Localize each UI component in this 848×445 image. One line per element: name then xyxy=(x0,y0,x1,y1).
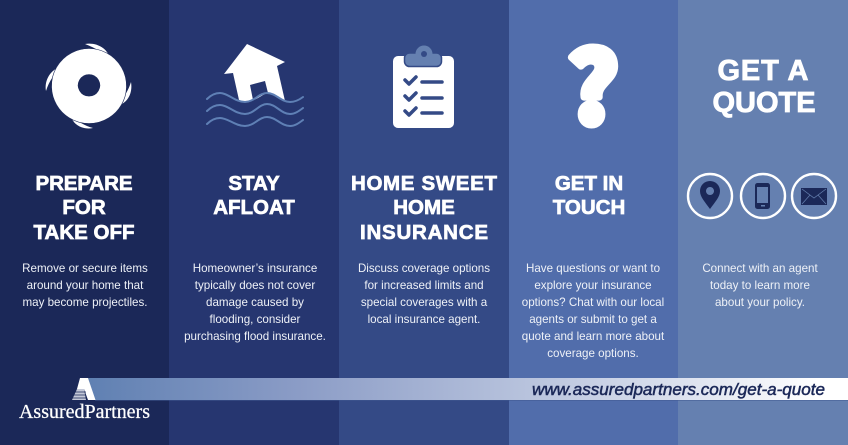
body text: Remove or secure items xyxy=(22,262,148,275)
body text: coverage options. xyxy=(547,347,639,360)
logo wordmark: AssuredPartners xyxy=(19,401,150,423)
heading: PREPARE xyxy=(36,172,132,195)
icon: location pin xyxy=(688,174,732,218)
heading: AFLOAT xyxy=(213,196,295,219)
heading: QUOTE xyxy=(712,87,816,119)
body text: agents or submit to get a xyxy=(529,313,657,326)
heading: INSURANCE xyxy=(360,221,488,244)
panel: get a quote xyxy=(678,0,848,445)
body text: flooding, consider xyxy=(210,313,301,326)
heading: TAKE OFF xyxy=(34,221,134,244)
panel: prepare for take off xyxy=(0,0,169,445)
body text: local insurance agent. xyxy=(368,313,480,326)
heading: GET A xyxy=(718,55,809,87)
body text: special coverages with a xyxy=(361,296,488,309)
icon: clipboard checklist xyxy=(393,46,454,128)
heading: HOME xyxy=(393,196,455,219)
body text: Discuss coverage options xyxy=(358,262,490,275)
body text: options? Chat with our local xyxy=(522,296,664,309)
logo mark xyxy=(72,378,96,400)
url banner xyxy=(88,378,848,401)
icon: phone xyxy=(741,174,785,218)
body text: Homeowner’s insurance xyxy=(193,262,317,275)
panel: get in touch xyxy=(509,0,678,445)
heading: GET IN xyxy=(555,172,623,195)
logo: AssuredPartners xyxy=(19,378,150,423)
panel: stay afloat xyxy=(169,0,339,445)
body text: for increased limits and xyxy=(364,279,484,292)
body text: today to learn more xyxy=(710,279,810,292)
body text: typically does not cover xyxy=(195,279,315,292)
body text: around your home that xyxy=(27,279,144,292)
body text: explore your insurance xyxy=(534,279,652,292)
body text: Have questions or want to xyxy=(526,262,660,275)
body text: about your policy. xyxy=(715,296,805,309)
panel: home sweet home insurance xyxy=(339,0,509,445)
heading: TOUCH xyxy=(553,196,625,219)
icon: question mark: ? xyxy=(567,11,619,153)
body text: purchasing flood insurance. xyxy=(184,330,326,343)
body text: quote and learn more about xyxy=(522,330,665,343)
heading: HOME SWEET xyxy=(351,172,497,195)
body text: Connect with an agent xyxy=(702,262,818,275)
heading: FOR xyxy=(62,196,106,219)
heading: STAY xyxy=(228,172,280,195)
icon: hurricane xyxy=(46,44,131,128)
url text: www.assuredpartners.com/get-a-quote xyxy=(532,381,825,399)
icon: envelope xyxy=(792,174,836,218)
icon: flooded house xyxy=(207,44,303,126)
body text: damage caused by xyxy=(206,296,304,309)
body text: may become projectiles. xyxy=(22,296,148,309)
